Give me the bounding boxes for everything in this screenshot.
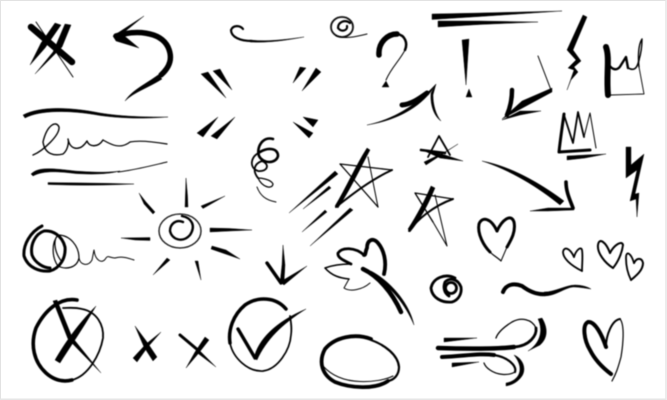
icon: curved back arrow — [113, 16, 170, 101]
icon: sun with rays — [121, 178, 252, 280]
icon: winged leaf — [325, 240, 414, 325]
icon: crown sketch — [606, 39, 644, 95]
icon: thick oval — [322, 336, 399, 387]
icon: scribbled cross — [30, 22, 73, 77]
icon: small spiral top — [331, 17, 367, 37]
icon: small scribbled star — [420, 136, 463, 165]
icon: flourish lines — [23, 108, 168, 185]
icon: heart large — [479, 218, 514, 261]
icon: long curved arrow — [482, 161, 574, 211]
icon: small heart three — [626, 253, 643, 280]
icon: curly spring — [252, 138, 278, 202]
icon: circled cross — [33, 300, 103, 381]
icon: speed lines — [432, 11, 562, 27]
icon: large star with streaks — [289, 148, 392, 246]
icon: exclamation mark — [462, 39, 472, 97]
icon: small cross two — [180, 335, 216, 368]
icon: second crown — [559, 112, 606, 160]
icon: small heart one — [563, 248, 582, 271]
icon: upward flick arrow — [367, 84, 441, 125]
icon: bent down arrow — [502, 56, 552, 120]
icon: lightning bolt — [567, 15, 587, 90]
icon: burst marks — [197, 67, 321, 139]
icon: small heart two — [598, 241, 623, 268]
icon: outlined star — [408, 186, 453, 246]
icon: wavy stroke — [503, 284, 591, 296]
icon: second lightning bolt — [626, 147, 644, 217]
icon: bottom heart — [584, 319, 623, 381]
icon: circled check mark — [230, 299, 306, 371]
icon: small arrow — [267, 245, 307, 285]
icon: eye spiral — [431, 276, 461, 302]
icon: question mark — [379, 34, 406, 87]
icon: small cross one — [133, 326, 161, 362]
icon: scribbled spiral — [24, 226, 134, 271]
icon: wind gust — [438, 318, 546, 386]
icon: swirl stroke — [231, 26, 304, 42]
